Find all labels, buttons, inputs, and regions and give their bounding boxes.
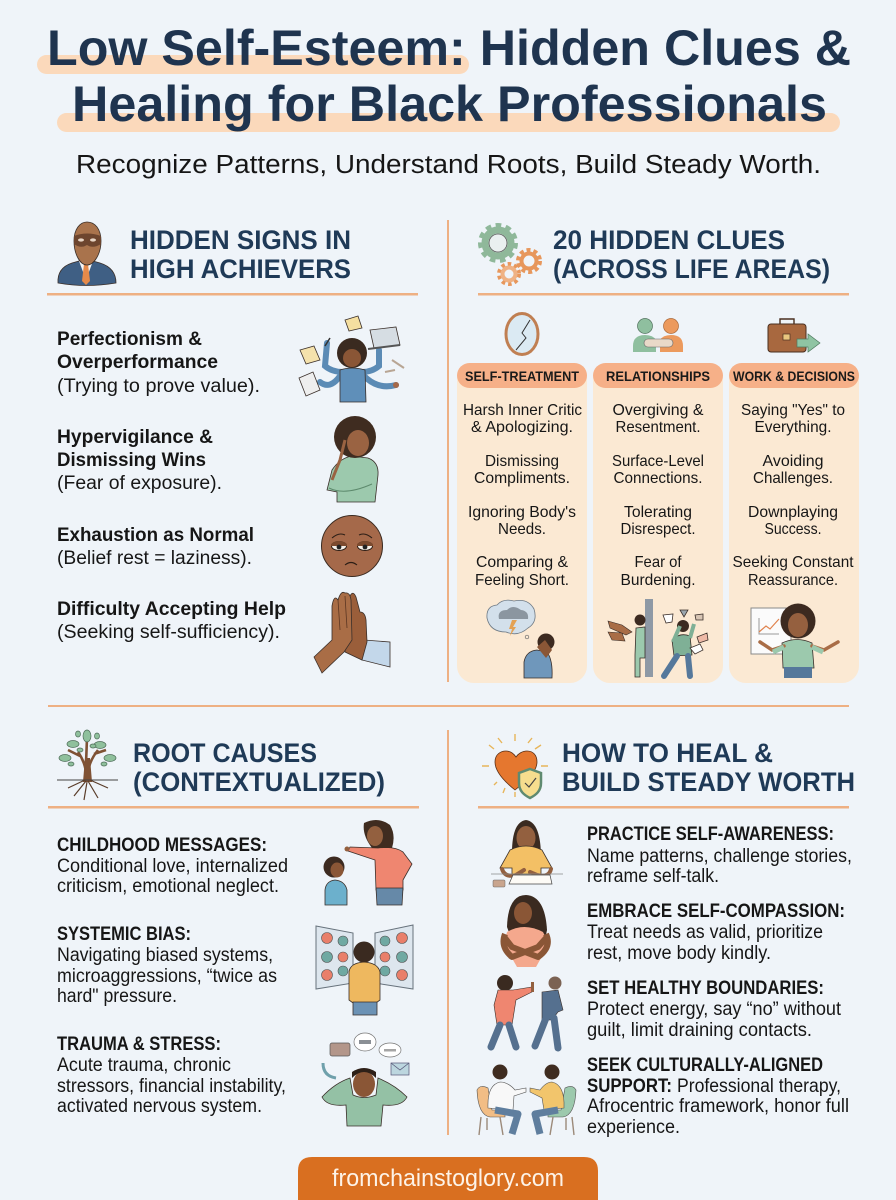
step: culturally aligned support: experience. xyxy=(587,1117,680,1138)
heading xyxy=(133,738,385,797)
step: self-awareness: PRACTICE SELF-AWARENESS: xyxy=(587,824,834,845)
illustration: woman journaling xyxy=(491,820,563,887)
footer url badge xyxy=(298,1157,598,1200)
column: relationships xyxy=(593,363,723,683)
column: self-treatment: Dismissing xyxy=(485,453,559,470)
step: culturally aligned support: Professional therapy, xyxy=(677,1076,841,1097)
column: work and decisions: Success. xyxy=(764,521,822,538)
dividers xyxy=(47,220,849,1135)
step: culturally aligned support: SEEK CULTURALLY-ALIGNED xyxy=(587,1055,823,1076)
column: relationships: Connections. xyxy=(614,470,702,487)
sign: perfectionism: Overperformance xyxy=(57,352,218,373)
panel: how to heal xyxy=(477,734,855,1138)
column: relationships: Tolerating xyxy=(624,504,692,521)
illustration: worried woman xyxy=(327,416,378,502)
step: self-awareness: Name patterns, challenge stories, xyxy=(587,846,852,867)
column: work and decisions xyxy=(729,363,859,683)
sign: hypervigilance xyxy=(57,427,222,494)
icon: two people bandage xyxy=(633,318,683,352)
heading xyxy=(562,738,855,797)
sign: hypervigilance: Dismissing Wins xyxy=(57,450,206,471)
column: self-treatment: Ignoring Body's xyxy=(468,504,576,521)
panel: hidden signs in high achievers xyxy=(57,222,404,673)
sign: accepting help xyxy=(57,599,286,643)
column: relationships: Fear of xyxy=(634,554,682,571)
sign: exhaustion: (Belief rest = laziness). xyxy=(57,548,252,569)
step: boundaries: guilt, limit draining contacts. xyxy=(587,1020,812,1041)
cause: trauma and stress: stressors, financial instability, xyxy=(57,1076,286,1097)
cause: systemic bias: SYSTEMIC BIAS: xyxy=(57,924,191,945)
column: self-treatment: Comparing & xyxy=(476,554,568,571)
heading: ROOT CAUSES xyxy=(133,738,317,768)
icon: briefcase with arrow xyxy=(768,319,820,352)
heading xyxy=(130,225,351,284)
column: self-treatment: Needs. xyxy=(498,521,546,538)
step: self-awareness xyxy=(587,824,852,887)
cause: trauma and stress: Acute trauma, chronic xyxy=(57,1055,231,1076)
heading: (CONTEXTUALIZED) xyxy=(133,767,385,797)
illustration: wall and retreating figures xyxy=(608,599,708,677)
cause: systemic bias: hard" pressure. xyxy=(57,986,177,1007)
column: work and decisions: Saying "Yes" to xyxy=(741,402,845,419)
illustration: overwhelmed man xyxy=(322,1033,409,1126)
illustration: hands refusing help xyxy=(314,592,390,673)
heading: HOW TO HEAL & xyxy=(562,738,773,768)
cause: systemic bias: microaggressions, “twice as xyxy=(57,966,277,987)
column: work and decisions: Reassurance. xyxy=(748,572,838,589)
title: Healing for Black Professionals xyxy=(72,76,827,132)
illustration: person between biased panels xyxy=(316,925,413,1015)
heading: BUILD STEADY WORTH xyxy=(562,767,855,797)
sign: accepting help: Difficulty Accepting Help xyxy=(57,599,286,620)
icon: gears xyxy=(480,226,540,284)
title xyxy=(37,20,851,132)
illustration: therapy session xyxy=(477,1064,576,1135)
step: self-compassion: EMBRACE SELF-COMPASSION: xyxy=(587,901,845,922)
cause: trauma and stress xyxy=(57,1034,286,1117)
cause: systemic bias: Navigating biased systems, xyxy=(57,945,273,966)
column: self-treatment: Feeling Short. xyxy=(475,572,569,589)
column: work and decisions: Seeking Constant xyxy=(732,554,854,571)
subtitle: Recognize Patterns, Understand Roots, Build Steady Worth. xyxy=(76,151,821,179)
column: self-treatment: & Apologizing. xyxy=(471,419,573,436)
cause: trauma and stress: TRAUMA & STRESS: xyxy=(57,1034,221,1055)
column: relationships: Burdening. xyxy=(620,572,696,589)
column: relationships: Surface-Level xyxy=(612,453,704,470)
cause: childhood messages: CHILDHOOD MESSAGES: xyxy=(57,835,267,856)
illustration: setting a boundary xyxy=(491,975,563,1048)
cause: childhood messages: criticism, emotional neglect. xyxy=(57,876,279,897)
column: work and decisions: Everything. xyxy=(754,419,832,436)
step: boundaries: SET HEALTHY BOUNDARIES: xyxy=(587,978,824,999)
column: self-treatment xyxy=(457,363,587,683)
heading xyxy=(553,225,830,284)
step: self-compassion: rest, move body kindly. xyxy=(587,943,771,964)
heading: (ACROSS LIFE AREAS) xyxy=(553,254,830,284)
icon: tired face xyxy=(322,516,382,576)
column: relationships: Overgiving & xyxy=(612,402,704,419)
heading: HIGH ACHIEVERS xyxy=(130,254,351,284)
sign: hypervigilance: Hypervigilance & xyxy=(57,427,213,448)
sign: accepting help: (Seeking self-sufficiency). xyxy=(57,622,280,643)
column: self-treatment: SELF-TREATMENT xyxy=(465,368,579,384)
column: work and decisions: Challenges. xyxy=(753,470,833,487)
step: boundaries: Protect energy, say “no” without xyxy=(587,999,842,1020)
column: self-treatment: Compliments. xyxy=(474,470,570,487)
sign: perfectionism xyxy=(57,329,260,397)
sign: perfectionism: Perfectionism & xyxy=(57,329,202,350)
column: relationships: RELATIONSHIPS xyxy=(606,368,710,384)
title: Low Self-Esteem: Hidden Clues & xyxy=(47,20,851,76)
column: work and decisions: Downplaying xyxy=(748,504,838,521)
icon: tree with roots xyxy=(57,730,118,800)
illustration: juggling woman xyxy=(299,316,404,402)
sign: exhaustion xyxy=(57,525,254,569)
cause: childhood messages xyxy=(57,835,288,897)
column: relationships: Resentment. xyxy=(616,419,700,436)
icon: heart and shield xyxy=(482,734,548,798)
footer url badge: fromchainstoglory.com xyxy=(332,1165,564,1192)
cause: systemic bias xyxy=(57,924,277,1007)
step: self-compassion xyxy=(587,901,845,964)
sign: perfectionism: (Trying to prove value). xyxy=(57,376,260,397)
icon: masked professional xyxy=(58,222,116,286)
step: culturally aligned support: SUPPORT: xyxy=(587,1076,672,1097)
illustration: parent scolding child xyxy=(324,820,412,905)
cause: trauma and stress: activated nervous system. xyxy=(57,1096,262,1117)
column: work and decisions: Avoiding xyxy=(762,453,824,470)
step: culturally aligned support xyxy=(587,1055,849,1138)
illustration: woman hugging herself xyxy=(504,895,549,967)
step: self-compassion: Treat needs as valid, prioritize xyxy=(587,922,823,943)
step: self-awareness: reframe self-talk. xyxy=(587,866,719,887)
illustration: presenter shrugging xyxy=(751,604,838,678)
panel: root causes xyxy=(57,730,413,1126)
column: self-treatment: Harsh Inner Critic xyxy=(463,402,582,419)
icon: cracked mirror xyxy=(506,314,538,354)
heading: HIDDEN SIGNS IN xyxy=(130,225,351,255)
illustration: storm cloud thought xyxy=(487,600,554,678)
cause: childhood messages: Conditional love, internalized xyxy=(57,856,288,877)
step: boundaries xyxy=(587,978,842,1041)
column: relationships: Disrespect. xyxy=(620,521,696,538)
step: culturally aligned support: Afrocentric framework, honor full xyxy=(587,1096,849,1117)
sign: exhaustion: Exhaustion as Normal xyxy=(57,525,254,546)
sign: hypervigilance: (Fear of exposure). xyxy=(57,473,222,494)
panel: 20 hidden clues xyxy=(457,225,859,683)
heading: 20 HIDDEN CLUES xyxy=(553,225,785,255)
column: work and decisions: WORK & DECISIONS xyxy=(733,368,855,384)
